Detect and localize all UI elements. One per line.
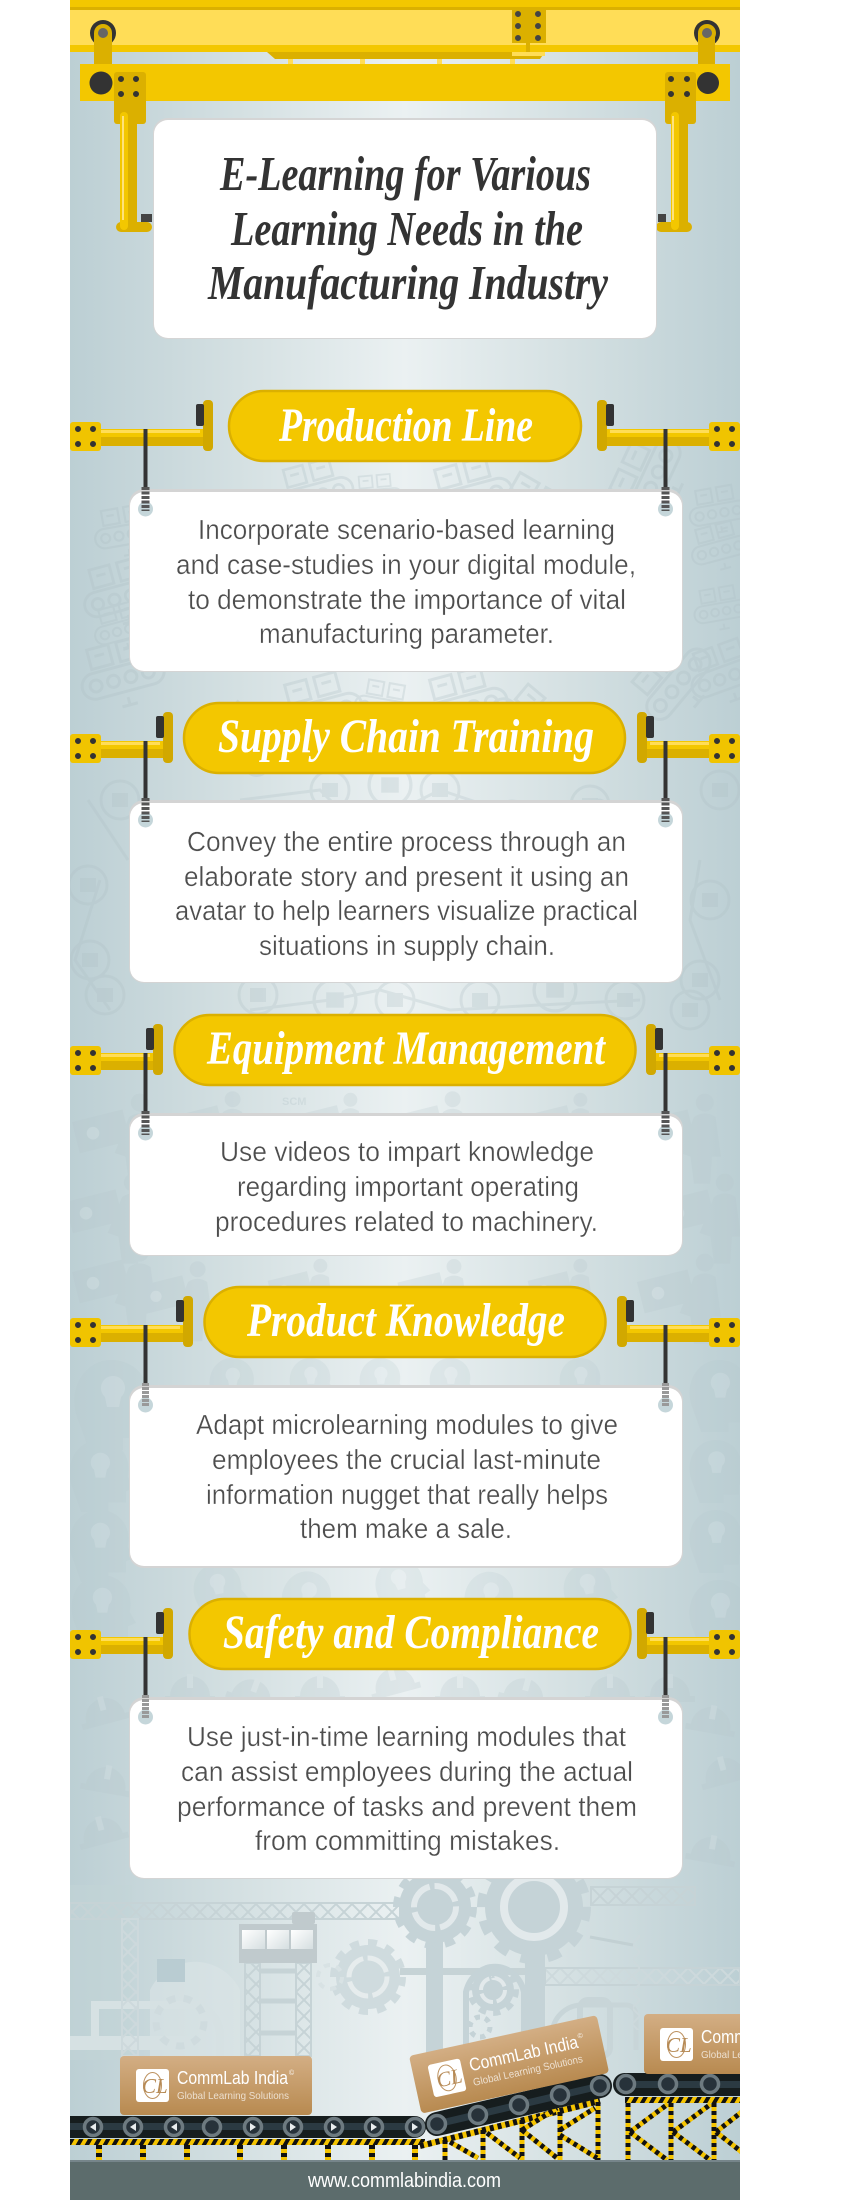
body text: from committing mistakes. bbox=[255, 1825, 560, 1856]
heading: supply chain training: Supply Chain Training bbox=[218, 710, 594, 763]
brackets: product knowledge bbox=[70, 1296, 740, 1347]
brackets: safety and compliance bbox=[70, 1608, 740, 1659]
body text: information nugget that really helps bbox=[206, 1479, 608, 1510]
brand box 3 bbox=[644, 2014, 836, 2074]
body text bbox=[175, 826, 638, 961]
footer bar: www.commlabindia.com bbox=[307, 2170, 501, 2192]
heading: product knowledge bbox=[204, 1287, 606, 1357]
panel: product knowledge bbox=[129, 1325, 683, 1568]
brand box 1: CL bbox=[142, 2074, 168, 2098]
body text: them make a sale. bbox=[300, 1513, 512, 1544]
title text: E-Learning for Various bbox=[219, 146, 591, 201]
brackets: supply chain training bbox=[70, 712, 740, 763]
title text bbox=[207, 146, 608, 310]
body text: manufacturing parameter. bbox=[259, 618, 554, 649]
body text: to demonstrate the importance of vital bbox=[188, 584, 626, 615]
footer bar bbox=[70, 2160, 740, 2200]
body text: can assist employees during the actual bbox=[181, 1756, 633, 1787]
body text: Use just-in-time learning modules that bbox=[187, 1721, 626, 1752]
heading: production line: Production Line bbox=[278, 399, 533, 452]
panel: equipment management bbox=[129, 1053, 683, 1256]
body text: procedures related to machinery. bbox=[215, 1206, 598, 1237]
title card bbox=[153, 118, 657, 339]
gears bbox=[156, 1855, 586, 2060]
brand box 2: Global Learning Solutions bbox=[472, 2053, 584, 2089]
panel: supply chain bbox=[129, 741, 683, 983]
body text: avatar to help learners visualize practical bbox=[175, 895, 638, 926]
heading: product knowledge: Product Knowledge bbox=[246, 1294, 565, 1347]
hanger ropes bbox=[138, 1325, 673, 1412]
body text: performance of tasks and prevent them bbox=[177, 1791, 637, 1822]
background pattern: supply chain network: SCM bbox=[308, 823, 332, 835]
heading: equipment management: Equipment Management bbox=[206, 1022, 606, 1075]
brand box 1: Global Learning Solutions bbox=[177, 2090, 289, 2102]
background pattern: conveyor icons bbox=[158, 446, 649, 777]
body text: regarding important operating bbox=[237, 1171, 579, 1202]
brand box 2: CL bbox=[434, 2063, 465, 2092]
conveyor rollers bbox=[84, 2076, 718, 2136]
body text bbox=[177, 1721, 637, 1856]
brand box 1: CommLab India bbox=[177, 2068, 289, 2088]
factory silhouette background bbox=[70, 1885, 740, 2060]
brand box 1 bbox=[120, 2056, 312, 2115]
background panel bbox=[70, 0, 740, 2160]
background pattern: supply chain network bbox=[238, 774, 635, 1105]
background pattern: supply chain network: SCM bbox=[282, 1096, 306, 1108]
heading: safety and compliance: Safety and Compliance bbox=[223, 1606, 599, 1659]
background pattern: knowledge heads bbox=[296, 1358, 513, 1598]
panel: safety and compliance bbox=[129, 1637, 683, 1879]
brand box 2 bbox=[409, 2015, 609, 2114]
heading: production line bbox=[229, 391, 581, 461]
brand box 2: CommLab India bbox=[467, 2032, 581, 2075]
brand box 3: Global Learning Solutions bbox=[701, 2049, 813, 2061]
hanger ropes bbox=[138, 1637, 673, 1724]
crane rollers and beam bbox=[80, 20, 730, 101]
brand box 2: © bbox=[577, 2031, 584, 2041]
body text: situations in supply chain. bbox=[259, 930, 555, 961]
body text: Incorporate scenario-based learning bbox=[198, 514, 615, 545]
title text: Manufacturing Industry bbox=[207, 255, 608, 310]
body text bbox=[215, 1136, 598, 1237]
heading: safety and compliance bbox=[190, 1599, 630, 1669]
brand box 1: © bbox=[289, 2069, 295, 2077]
title text: Learning Needs in the bbox=[230, 201, 583, 256]
hanger ropes bbox=[138, 429, 673, 516]
background pattern: safety helmets bbox=[260, 1670, 543, 1697]
conveyor belts bbox=[60, 2073, 753, 2138]
left crane arm bbox=[114, 72, 152, 232]
roller arrows bbox=[90, 2123, 418, 2131]
hanger ropes bbox=[138, 1053, 673, 1140]
brand box 3: CL bbox=[666, 2033, 692, 2057]
top crane rail bbox=[70, 0, 740, 64]
brackets: production line bbox=[70, 400, 740, 451]
body text: elaborate story and present it using an bbox=[184, 861, 629, 892]
conveyor supports bbox=[70, 2097, 752, 2160]
body text bbox=[176, 514, 636, 649]
body text: and case-studies in your digital module, bbox=[176, 549, 636, 580]
background pattern: equipment workers bbox=[268, 1092, 550, 1286]
heading: equipment management bbox=[174, 1015, 636, 1085]
body text: Use videos to impart knowledge bbox=[220, 1136, 594, 1167]
right crane arm bbox=[656, 72, 696, 232]
body text bbox=[196, 1409, 618, 1544]
heading: supply chain training bbox=[184, 703, 625, 773]
control tower bbox=[239, 1912, 317, 2056]
brand box 3: CommLab India bbox=[701, 2027, 813, 2047]
body text: Adapt microlearning modules to give bbox=[196, 1409, 618, 1440]
background pattern: supply chain network: SCM bbox=[233, 803, 257, 815]
body text: Convey the entire process through an bbox=[187, 826, 626, 857]
body text: employees the crucial last-minute bbox=[212, 1444, 601, 1475]
hanger ropes bbox=[138, 741, 673, 828]
panel: production line bbox=[129, 429, 683, 672]
brackets: equipment management bbox=[70, 1024, 740, 1075]
